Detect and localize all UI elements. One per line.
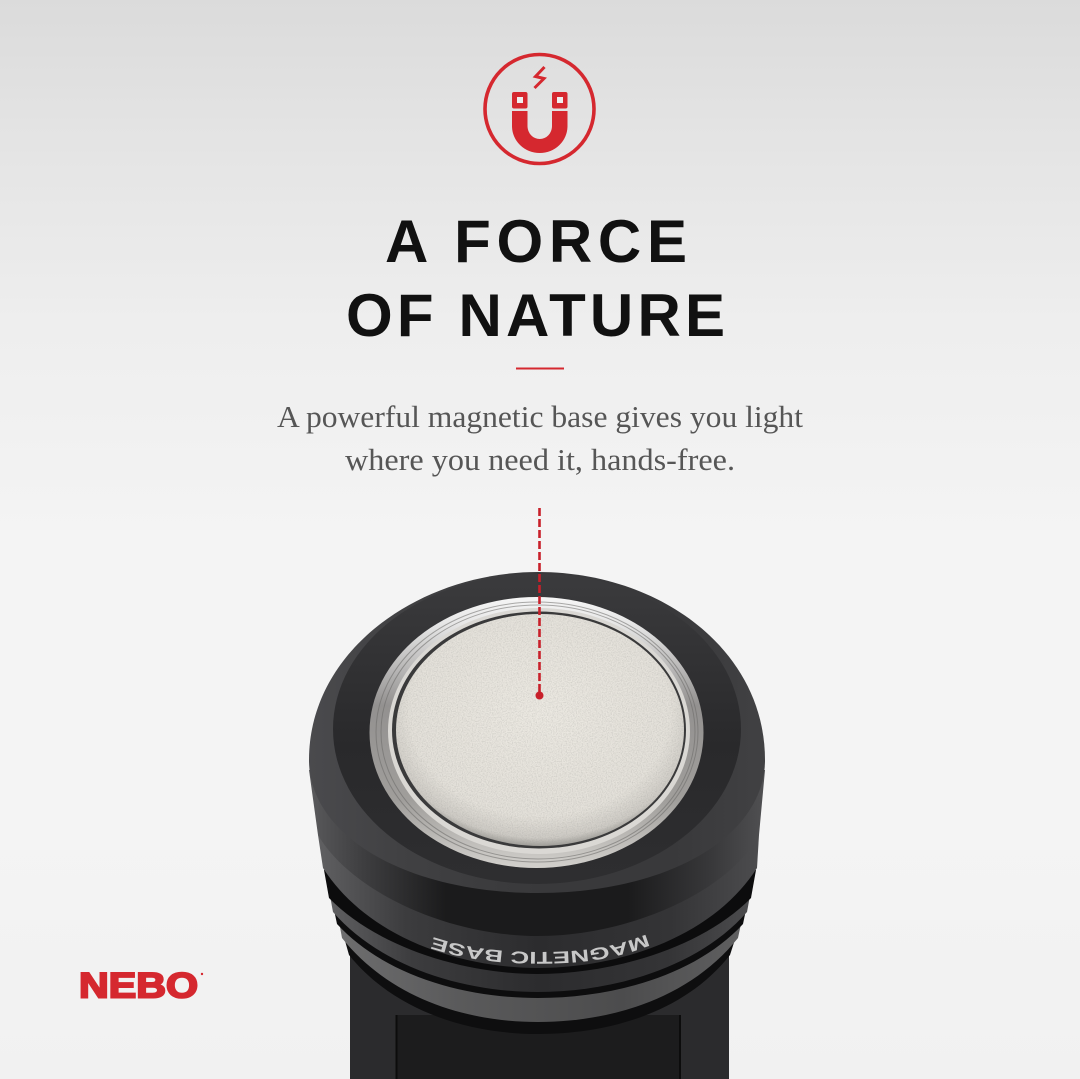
title: OF NATURE (346, 282, 725, 349)
description text (277, 400, 804, 477)
cap lower band (309, 770, 765, 936)
cap shoulder (309, 572, 765, 893)
icon: magnet badge (485, 54, 594, 164)
description text: A powerful magnetic base gives you light (277, 400, 804, 434)
callout dashed line (538, 508, 541, 693)
flashlight grip (350, 950, 729, 1079)
ring inner shadow (392, 612, 686, 848)
engraved label: MAGNETIC BASE (431, 934, 650, 964)
flashlight ridges (318, 835, 759, 1034)
title: A FORCE (385, 208, 687, 275)
callout dot (536, 692, 544, 700)
magnet disc (396, 614, 684, 846)
description text: where you need it, hands-free. (345, 443, 735, 477)
cap top face (333, 574, 741, 884)
title (346, 208, 725, 349)
metal ring (370, 597, 704, 868)
logo: NEBO: NEBO (79, 966, 198, 1006)
ring inner highlight (388, 608, 690, 854)
ring grooves (376, 602, 698, 862)
divider rule (516, 368, 564, 370)
flashlight product (309, 572, 765, 1079)
